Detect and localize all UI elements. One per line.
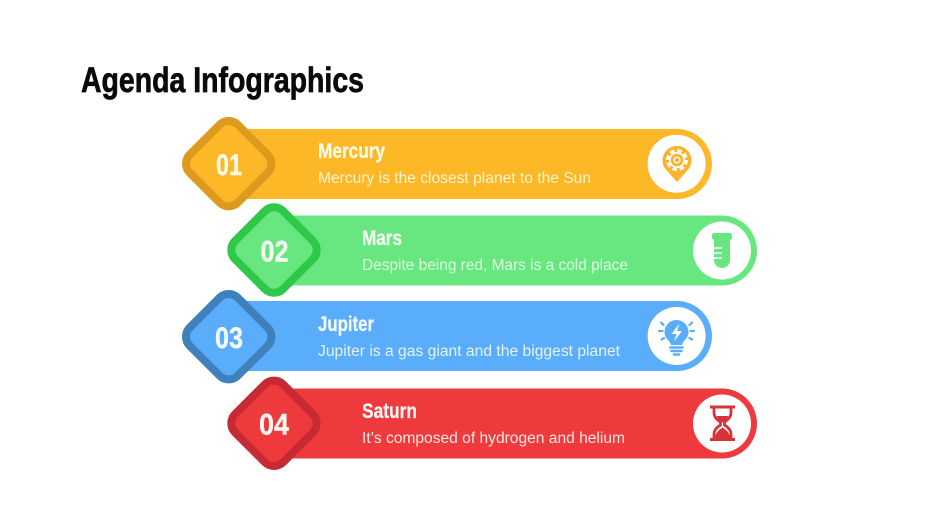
title: Agenda Infographics bbox=[81, 61, 364, 100]
badge: 03: 03 bbox=[215, 322, 243, 355]
heading: Jupiter: Jupiter bbox=[318, 313, 374, 336]
panel: Mars bbox=[226, 202, 757, 298]
badge: 01 bbox=[181, 116, 277, 212]
badge: 04: 04 bbox=[259, 408, 289, 442]
bar: Jupiter bbox=[228, 301, 712, 371]
text: Mercury description: Mercury is the closest planet to the Sun bbox=[318, 170, 591, 187]
badge: 03 bbox=[181, 289, 277, 385]
icon: light bulb bbox=[648, 307, 706, 365]
bar: Saturn bbox=[274, 388, 757, 458]
text: Mars description: Despite being red, Mars is a cold place bbox=[362, 257, 628, 274]
badge: 02: 02 bbox=[260, 236, 288, 268]
bar: Mercury bbox=[228, 129, 712, 199]
panel: Saturn bbox=[226, 375, 757, 471]
badge: 01: 01 bbox=[216, 149, 242, 182]
icon: location pin with gear bbox=[648, 135, 706, 193]
panel: Mercury bbox=[181, 116, 712, 212]
badge: 02 bbox=[226, 202, 322, 298]
heading: Mercury: Mercury bbox=[318, 140, 385, 163]
text: Jupiter description: Jupiter is a gas giant and the biggest planet bbox=[318, 343, 621, 360]
heading: Saturn: Saturn bbox=[362, 400, 417, 423]
heading: Mars: Mars bbox=[362, 227, 402, 250]
panel: Jupiter bbox=[181, 289, 712, 385]
icon: test tube bbox=[693, 222, 751, 280]
badge: 04 bbox=[226, 375, 322, 471]
text: Saturn description: It’s composed of hydrogen and helium bbox=[362, 430, 625, 447]
bar: Mars bbox=[274, 216, 757, 286]
icon: hourglass bbox=[693, 394, 751, 452]
